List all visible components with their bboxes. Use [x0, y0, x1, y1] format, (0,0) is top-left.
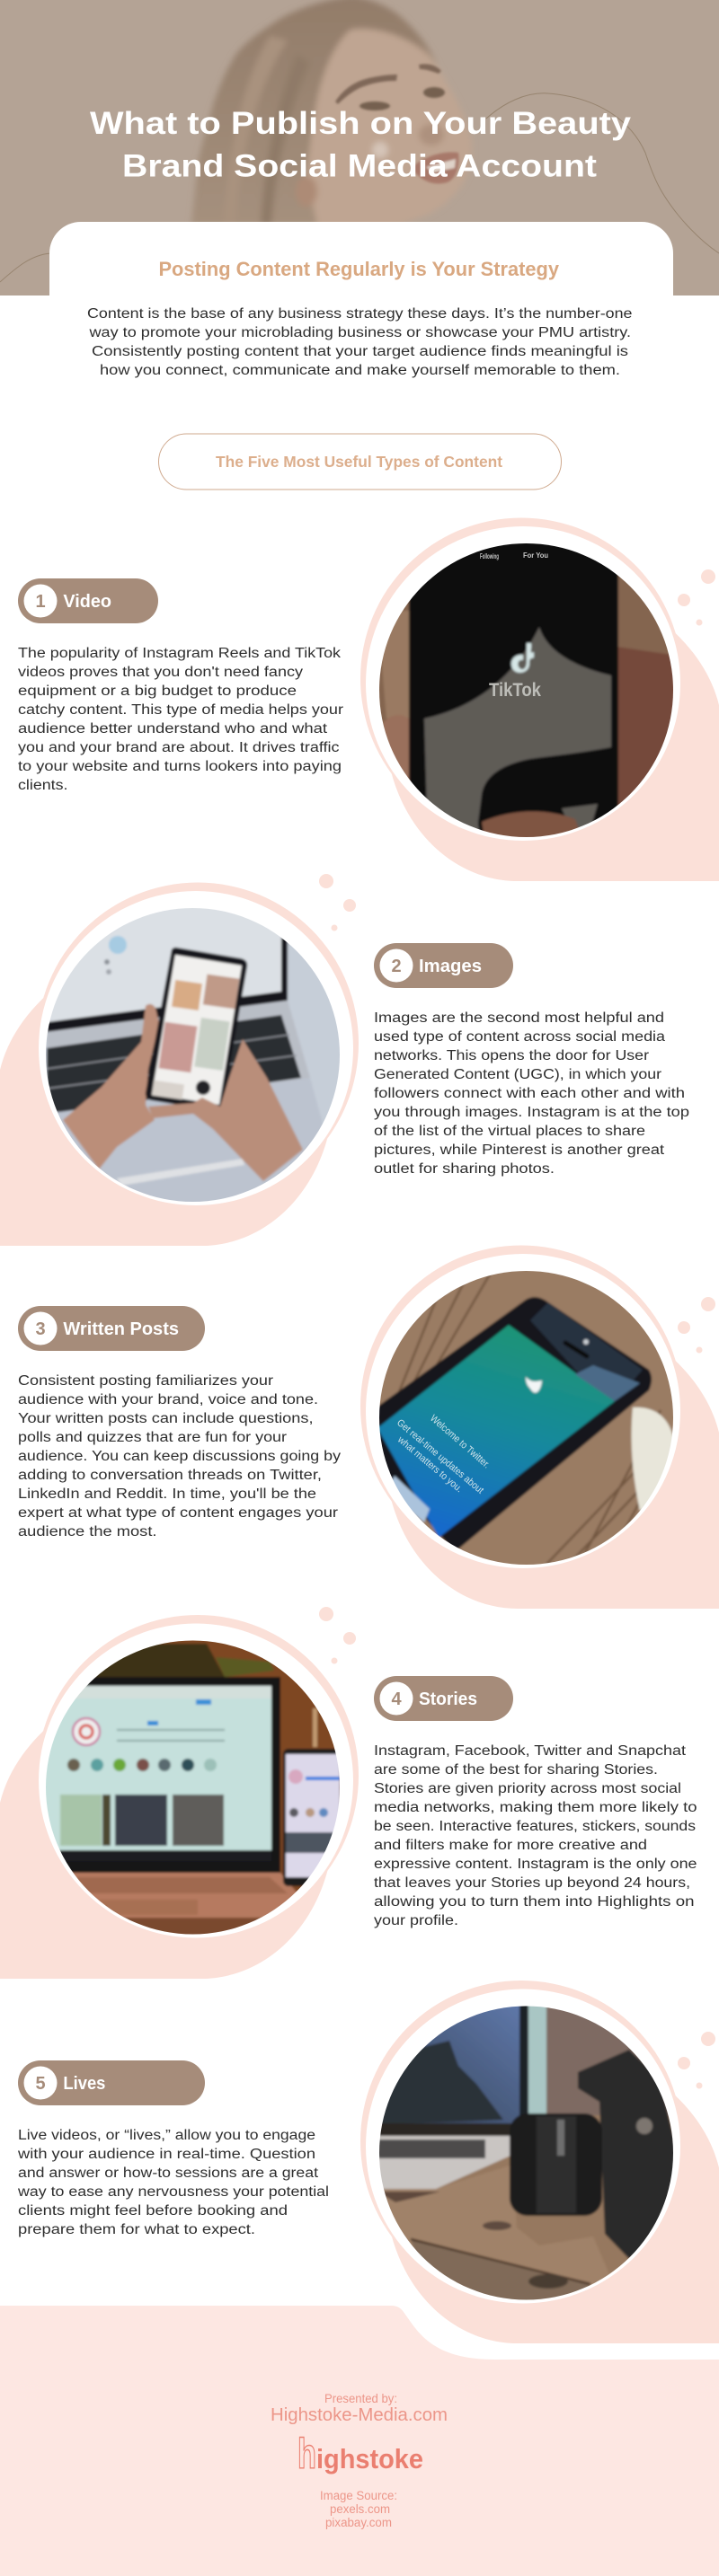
badge: 4 Stories: Stories	[419, 1689, 477, 1709]
text: images: followers connect with each other and with	[374, 1086, 685, 1101]
text: written posts: LinkedIn and Reddit. In time, you'll be the	[18, 1486, 316, 1502]
logo: highstoke: h	[297, 2430, 316, 2477]
footer credit: presented by: Highstoke-Media.com	[271, 2405, 448, 2425]
badge: 3 Written Posts: 3	[35, 1319, 46, 1339]
text: stories: your profile.	[374, 1913, 458, 1928]
badge: 4 Stories	[374, 1676, 513, 1721]
text: stories: are some of the best for sharing Stories.	[374, 1762, 658, 1778]
photo text: Twitter screen: Welcome to Twitter.	[428, 1413, 492, 1470]
title: What to Publish on Your Beauty	[90, 106, 632, 141]
text: written posts	[18, 1373, 341, 1539]
text: written posts: polls and quizzes that are fun for your	[18, 1430, 287, 1445]
text: lives: Live videos, or “lives,” allow you to engage	[18, 2128, 315, 2143]
text: video: you and your brand are about. It drives traffic	[18, 740, 340, 755]
text: video: clients.	[18, 778, 68, 793]
badge: 2 Images: Images	[419, 957, 482, 976]
intro heading: Posting Content Regularly is Your Strategy	[158, 258, 560, 280]
photo text: Twitter screen: Get real-time updates about	[395, 1417, 485, 1496]
hero banner with portrait photo	[0, 0, 719, 296]
badge: 4 Stories: 4	[391, 1689, 402, 1709]
photo text: TikTok: TikTok	[489, 680, 541, 701]
text: lives: way to ease any nervousness your potential	[17, 2184, 329, 2200]
text: lives: prepare them for what to expect.	[18, 2222, 255, 2237]
text: images: Images are the second most helpful and	[374, 1010, 664, 1026]
text: video: equipment or a big budget to produce	[18, 684, 297, 699]
photo: hands holding phone	[40, 903, 346, 1208]
intro paragraph: way to promote your microblading business or showcase your PMU artistry.	[88, 325, 631, 340]
badge: 2 Images: 2	[391, 957, 402, 976]
footer credit: image source: pexels.com	[330, 2502, 390, 2516]
text: images: Generated Content (UGC), in which your	[374, 1067, 661, 1082]
text: images	[374, 1010, 689, 1177]
intro paragraph: Consistently posting content that your target audience finds meaningful is	[92, 344, 628, 359]
subheading pill	[158, 434, 561, 490]
decorative hair-thin curves	[486, 93, 719, 253]
text: stories: media networks, making them more likely to	[374, 1800, 697, 1815]
footer credit: image source: pixabay.com	[325, 2516, 392, 2529]
text: video: The popularity of Instagram Reels and TikTok	[18, 646, 341, 661]
badge: 3 Written Posts: Written Posts	[63, 1319, 179, 1339]
text: images: you through images. Instagram is at the top	[374, 1105, 689, 1120]
photo: TikTok phone	[377, 539, 679, 844]
text: written posts: audience. You can keep discussions going by	[18, 1449, 341, 1464]
panel: lives	[360, 1981, 719, 2343]
text: lives: clients might feel before booking and	[18, 2203, 288, 2219]
footer credit: image source: Image Source:	[320, 2489, 397, 2502]
text: lives: and answer or how-to sessions are a great	[18, 2166, 319, 2181]
photo: TikTok phone: Following	[480, 552, 499, 560]
panel: video	[360, 517, 719, 881]
text: written posts: Consistent posting familiarizes your	[18, 1373, 273, 1389]
footer credit: presented by: Presented by:	[324, 2391, 397, 2405]
title	[90, 106, 632, 183]
panel: footer background	[0, 2306, 719, 2576]
text: stories: Stories are given priority across most social	[374, 1781, 681, 1796]
panel: written posts	[360, 1245, 719, 1609]
badge: 5 Lives: 5	[35, 2074, 46, 2094]
text: stories: be seen. Interactive features, stickers, sounds	[374, 1819, 696, 1834]
badge: 1 Video: 1	[35, 592, 46, 612]
photo: TikTok phone: For You	[523, 551, 548, 560]
text: video: catchy content. This type of media helps your	[18, 702, 343, 718]
footer credit: presented by	[271, 2391, 448, 2425]
badge: 5 Lives: Lives	[63, 2074, 105, 2094]
text: video: to your website and turns lookers into paying	[18, 759, 342, 774]
footer credit: image source	[320, 2489, 397, 2529]
photo text: Twitter screen: what matters to you.	[395, 1434, 465, 1495]
text: images: outlet for sharing photos.	[374, 1161, 555, 1177]
text: images: used type of content across social media	[374, 1029, 665, 1045]
logo: highstoke: ighstoke	[316, 2443, 423, 2475]
blob and dots: lives	[360, 1981, 719, 2343]
text: stories: allowing you to turn them into Highlights on	[374, 1894, 694, 1910]
photo: Instagram on laptop and phone	[40, 1635, 349, 1940]
text: video: videos proves that you don't need fancy	[18, 665, 303, 680]
intro paragraph: Content is the base of any business strategy these days. It’s the number-one	[87, 306, 633, 322]
text: stories: Instagram, Facebook, Twitter and Snapchat	[374, 1743, 687, 1759]
text: written posts: audience the most.	[18, 1524, 156, 1539]
text: images: of the list of the virtual places to share	[374, 1124, 645, 1139]
badge: 5 Lives	[18, 2060, 205, 2105]
panel: images	[0, 874, 359, 1246]
intro paragraph: how you connect, communicate and make yourself memorable to them.	[100, 363, 620, 378]
text: lives: with your audience in real-time. Question	[17, 2147, 315, 2162]
text: written posts: Your written posts can include questions,	[18, 1411, 313, 1426]
badge: 1 Video	[18, 578, 158, 623]
text: images: pictures, while Pinterest is another great	[374, 1142, 665, 1158]
photo: camera and laptop	[377, 2003, 679, 2304]
text: stories: that leaves your Stories up beyond 24 hours,	[374, 1875, 690, 1891]
title: Brand Social Media Account	[122, 149, 597, 183]
blob and dots: images	[0, 874, 359, 1246]
intro card	[49, 222, 673, 296]
text: stories	[374, 1743, 697, 1928]
text: written posts: expert at what type of content engages your	[18, 1505, 338, 1521]
blob and dots: video	[360, 517, 719, 881]
text: images: networks. This opens the door for User	[374, 1048, 649, 1063]
text: video	[18, 646, 343, 793]
photo: Twitter phone on wood	[377, 1266, 679, 1572]
blob and dots: stories	[0, 1607, 359, 1979]
blob and dots: written posts	[360, 1245, 719, 1609]
panel: stories	[0, 1607, 359, 1979]
text: lives	[17, 2128, 329, 2237]
text: video: audience better understand who and what	[18, 721, 328, 737]
text: written posts: adding to conversation threads on Twitter,	[18, 1468, 322, 1483]
text: stories: expressive content. Instagram is the only one	[374, 1857, 697, 1872]
badge: 2 Images	[374, 943, 513, 988]
badge: 3 Written Posts	[18, 1306, 205, 1351]
text: written posts: audience with your brand, voice and tone.	[18, 1392, 318, 1407]
text: stories: and filters make for more creative and	[374, 1838, 647, 1853]
subheading pill: The Five Most Useful Types of Content	[216, 453, 502, 471]
intro paragraph	[87, 306, 633, 378]
badge: 1 Video: Video	[63, 592, 111, 612]
